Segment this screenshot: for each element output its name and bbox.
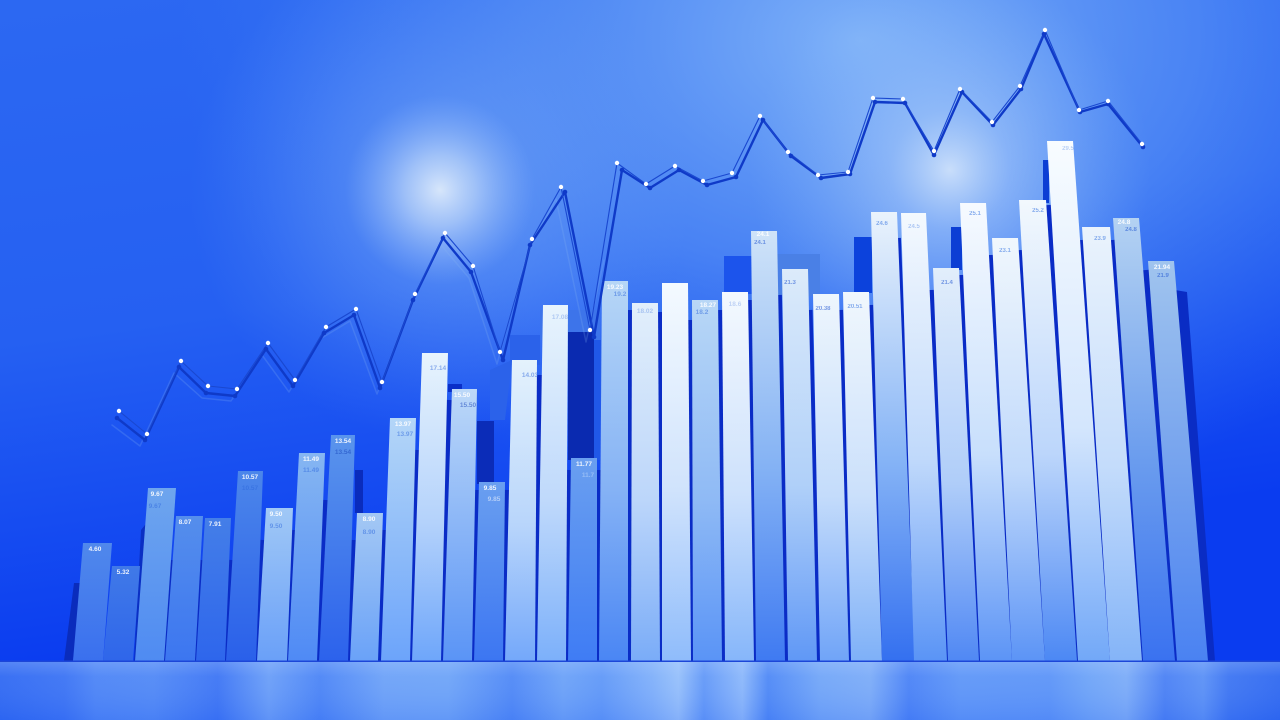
bar 17: 11.7: [582, 472, 595, 479]
bar 18: [599, 281, 628, 661]
bar 17: 11.77: [576, 461, 592, 468]
bar chart: [73, 141, 1208, 661]
bar 3: [135, 488, 176, 661]
bar 20: [662, 283, 691, 661]
bar 5: 7.91: [209, 521, 222, 528]
bar 18: 19.2: [614, 291, 627, 298]
bar 33: [1047, 141, 1110, 661]
shadow data points: [115, 32, 1145, 442]
bar 19: 18.02: [637, 308, 654, 315]
bar 13: 15.50: [460, 402, 477, 409]
bar 6: 10.57: [242, 474, 259, 481]
bar 35: 24.8: [1118, 219, 1131, 226]
bar 3: 9.67: [149, 503, 162, 510]
bar 8: [288, 453, 325, 661]
bar 33: 29.5: [1062, 146, 1074, 152]
bar 32: 25.2: [1032, 208, 1044, 214]
bar 12: [412, 353, 448, 661]
bar 30: [960, 203, 1012, 661]
bar 1: [73, 543, 112, 661]
bar 11: 13.97: [397, 431, 414, 438]
dark gaps between bars: [164, 205, 1176, 661]
line chart: [112, 28, 1145, 446]
bar 26: [843, 292, 882, 661]
bar 28: [901, 213, 947, 661]
bar 29: 21.4: [941, 280, 953, 286]
bar 2: 5.32: [117, 569, 130, 576]
bar 10: 8.90: [363, 516, 376, 523]
bar 14: [474, 482, 505, 661]
bar 6: 10.57: [242, 485, 259, 492]
bar 36: 21.94: [1154, 264, 1171, 271]
bar 18: 19.23: [607, 284, 624, 291]
bar 24: 21.3: [784, 280, 796, 286]
bar 14: 9.85: [488, 496, 501, 503]
white data points: [117, 28, 1144, 436]
bar 2: [103, 566, 140, 661]
bar 7: [257, 508, 293, 661]
bar 5: [196, 518, 231, 661]
bar 3: 9.67: [151, 491, 164, 498]
bar 13: 15.50: [454, 392, 471, 399]
bar 21: 18.27: [700, 302, 717, 309]
bar 16: 17.08: [552, 314, 569, 321]
bar 9: 13.54: [335, 449, 352, 456]
bar 22: [722, 292, 754, 661]
bar 16: [537, 305, 569, 661]
bar 11: 13.97: [395, 421, 412, 428]
bar 6: [226, 471, 263, 661]
bar 30: 25.1: [969, 211, 981, 217]
bar 15: [505, 360, 539, 661]
bar 7: 9.50: [270, 511, 283, 518]
bar 9: 13.54: [335, 438, 352, 445]
bar 21: [692, 300, 722, 661]
bar 14: 9.85: [484, 485, 497, 492]
bar 8: 11.49: [303, 456, 319, 463]
bar 17: [568, 458, 597, 661]
bar 11: [381, 418, 416, 661]
bar 12: 17.14: [430, 365, 447, 372]
bar 21: 18.2: [696, 309, 709, 316]
bar 29: [933, 268, 979, 661]
bar 32: [1019, 200, 1077, 661]
bar 23: 24.1: [754, 240, 766, 246]
bar 25: [813, 294, 849, 661]
bar 23: [751, 231, 785, 661]
bar 34: 23.9: [1094, 236, 1106, 242]
bar 36: 21.9: [1157, 273, 1169, 279]
bar 10: [350, 513, 383, 661]
bar 4: 8.07: [179, 519, 192, 526]
bar 10: 8.90: [363, 529, 376, 536]
bar 7: 9.50: [270, 523, 283, 530]
bar 4: [165, 516, 203, 661]
bar 22: 18.6: [729, 301, 742, 308]
bar 35: 24.8: [1125, 227, 1137, 233]
bar 26: 20.51: [847, 304, 863, 310]
bar 27: [871, 212, 915, 661]
bar 36: [1148, 261, 1208, 661]
bar 1: 4.60: [89, 546, 102, 553]
bar 9: [319, 435, 355, 661]
bar 27: 24.6: [876, 221, 888, 227]
bar 15: 14.03: [522, 372, 539, 379]
bar 23: 24.1: [757, 231, 770, 238]
bar 34: [1082, 227, 1142, 661]
bar 31: 23.1: [999, 248, 1011, 254]
bar 25: 20.38: [815, 306, 831, 312]
bar 31: [992, 238, 1045, 661]
cast shadows behind bars: [64, 160, 1215, 661]
bar 13: [443, 389, 477, 661]
reflective floor: [0, 660, 1280, 720]
bar 19: [631, 303, 660, 661]
bar 35: [1113, 218, 1175, 661]
bar 24: [782, 269, 817, 661]
bar 28: 24.5: [908, 224, 920, 230]
bar 8: 11.49: [303, 467, 319, 474]
